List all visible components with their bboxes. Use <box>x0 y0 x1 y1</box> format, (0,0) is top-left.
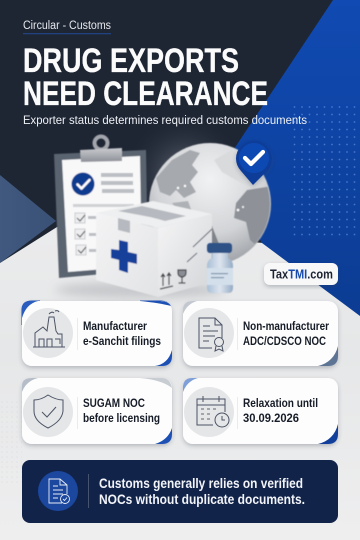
check badge <box>72 172 94 196</box>
callout text: NOCs without duplicate documents. <box>99 492 305 507</box>
card text: Manufacturer <box>83 319 147 333</box>
checklist boxes <box>75 213 86 255</box>
card text: e-Sanchit filings <box>83 334 161 348</box>
card text: Non-manufacturer <box>243 319 329 333</box>
brand badge <box>264 263 338 285</box>
icon: calendar clock <box>184 387 238 437</box>
eyebrow label: Circular - Customs <box>23 20 111 32</box>
icon: certificate document <box>184 308 238 358</box>
title: NEED CLEARANCE <box>23 75 268 113</box>
card: non-manufacturer <box>183 301 338 366</box>
card text <box>243 396 318 425</box>
box handling marks <box>160 270 186 289</box>
background: slate wedge <box>0 175 56 263</box>
illustration: shipping box <box>96 201 212 297</box>
icon: factory <box>23 308 78 358</box>
card text: Relaxation until <box>243 396 318 410</box>
brand badge: TaxTMI.com <box>270 268 333 282</box>
callout text <box>99 476 305 507</box>
callout: footer note <box>22 460 338 523</box>
background: blue diagonal panel <box>220 0 360 316</box>
subtitle: Exporter status determines required customs documents <box>23 113 307 127</box>
card text: SUGAM NOC <box>83 396 145 410</box>
clipboard board <box>54 150 148 278</box>
clipboard text lines <box>73 173 134 252</box>
icon: verified document <box>38 471 78 511</box>
card text <box>83 319 161 348</box>
card: sugam noc <box>22 378 172 444</box>
icon: location pin with check <box>236 141 272 185</box>
box damage marks <box>187 229 212 262</box>
box faces <box>96 201 212 297</box>
title <box>23 42 268 113</box>
card: manufacturer <box>22 301 172 366</box>
icon: shield check <box>23 387 78 437</box>
card: relaxation <box>183 378 338 444</box>
box tape <box>118 206 186 233</box>
callout text: Customs generally relies on verified <box>99 476 303 491</box>
card text <box>83 396 160 425</box>
illustration: globe <box>149 143 274 268</box>
illustration: vial <box>207 243 233 293</box>
illustration: clipboard <box>54 136 148 278</box>
title: DRUG EXPORTS <box>23 42 239 80</box>
card text: 30.09.2026 <box>243 411 299 425</box>
card text <box>243 319 329 348</box>
illustration: ground shadow <box>55 282 225 298</box>
card text: before licensing <box>83 411 160 425</box>
clipboard clip <box>80 136 122 162</box>
divider <box>88 474 89 508</box>
icon: medical cross <box>111 240 137 273</box>
background: dark header panel <box>0 0 340 263</box>
glow behind illustration <box>123 113 247 237</box>
card text: ADC/CDSCO NOC <box>243 334 326 348</box>
